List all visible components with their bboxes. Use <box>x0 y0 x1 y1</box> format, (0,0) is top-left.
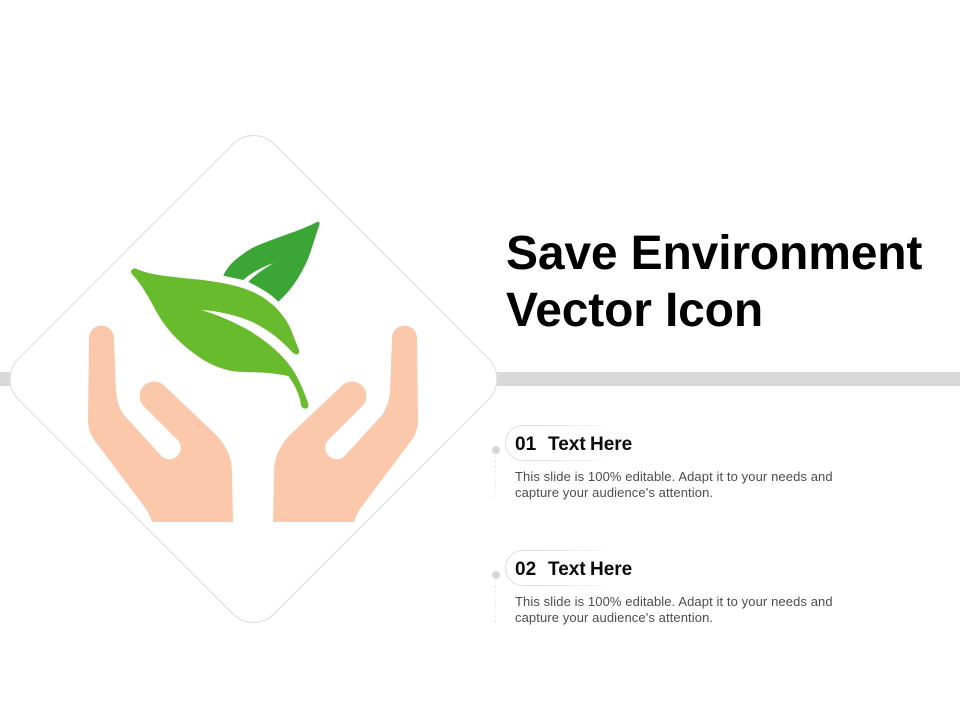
horizontal band <box>0 372 960 386</box>
heading 01: 01 <box>515 434 536 455</box>
title: Save Environment <box>506 227 922 280</box>
heading 02 <box>515 559 632 580</box>
heading 01: Here <box>590 434 632 455</box>
text 01: This slide is 100% editable. Adapt it to your needs and <box>515 469 833 484</box>
item 01 <box>492 425 598 498</box>
dot and dashed line <box>492 571 500 579</box>
text 01 <box>515 469 833 500</box>
text 02: This slide is 100% editable. Adapt it to your needs and <box>515 594 833 609</box>
heading 01 <box>515 434 632 455</box>
icon: dark leaf <box>223 222 320 302</box>
title <box>506 227 922 337</box>
title: Vector Icon <box>506 284 763 337</box>
dot and dashed line <box>492 446 500 454</box>
heading 02: Text <box>548 559 586 580</box>
item 02 <box>492 550 598 623</box>
heading 02: 02 <box>515 559 536 580</box>
text 01: capture your audience's attention. <box>515 485 713 500</box>
text 02: capture your audience's attention. <box>515 610 713 625</box>
icon: left hand <box>88 326 233 522</box>
heading 02: Here <box>590 559 632 580</box>
pill outline <box>505 550 598 586</box>
diamond outline <box>0 124 509 634</box>
diamond icon panel <box>10 135 497 623</box>
icon: light leaf <box>131 268 308 409</box>
pill outline <box>505 425 598 461</box>
text 02 <box>515 594 833 625</box>
icon: right hand <box>273 326 418 522</box>
heading 01: Text <box>548 434 586 455</box>
